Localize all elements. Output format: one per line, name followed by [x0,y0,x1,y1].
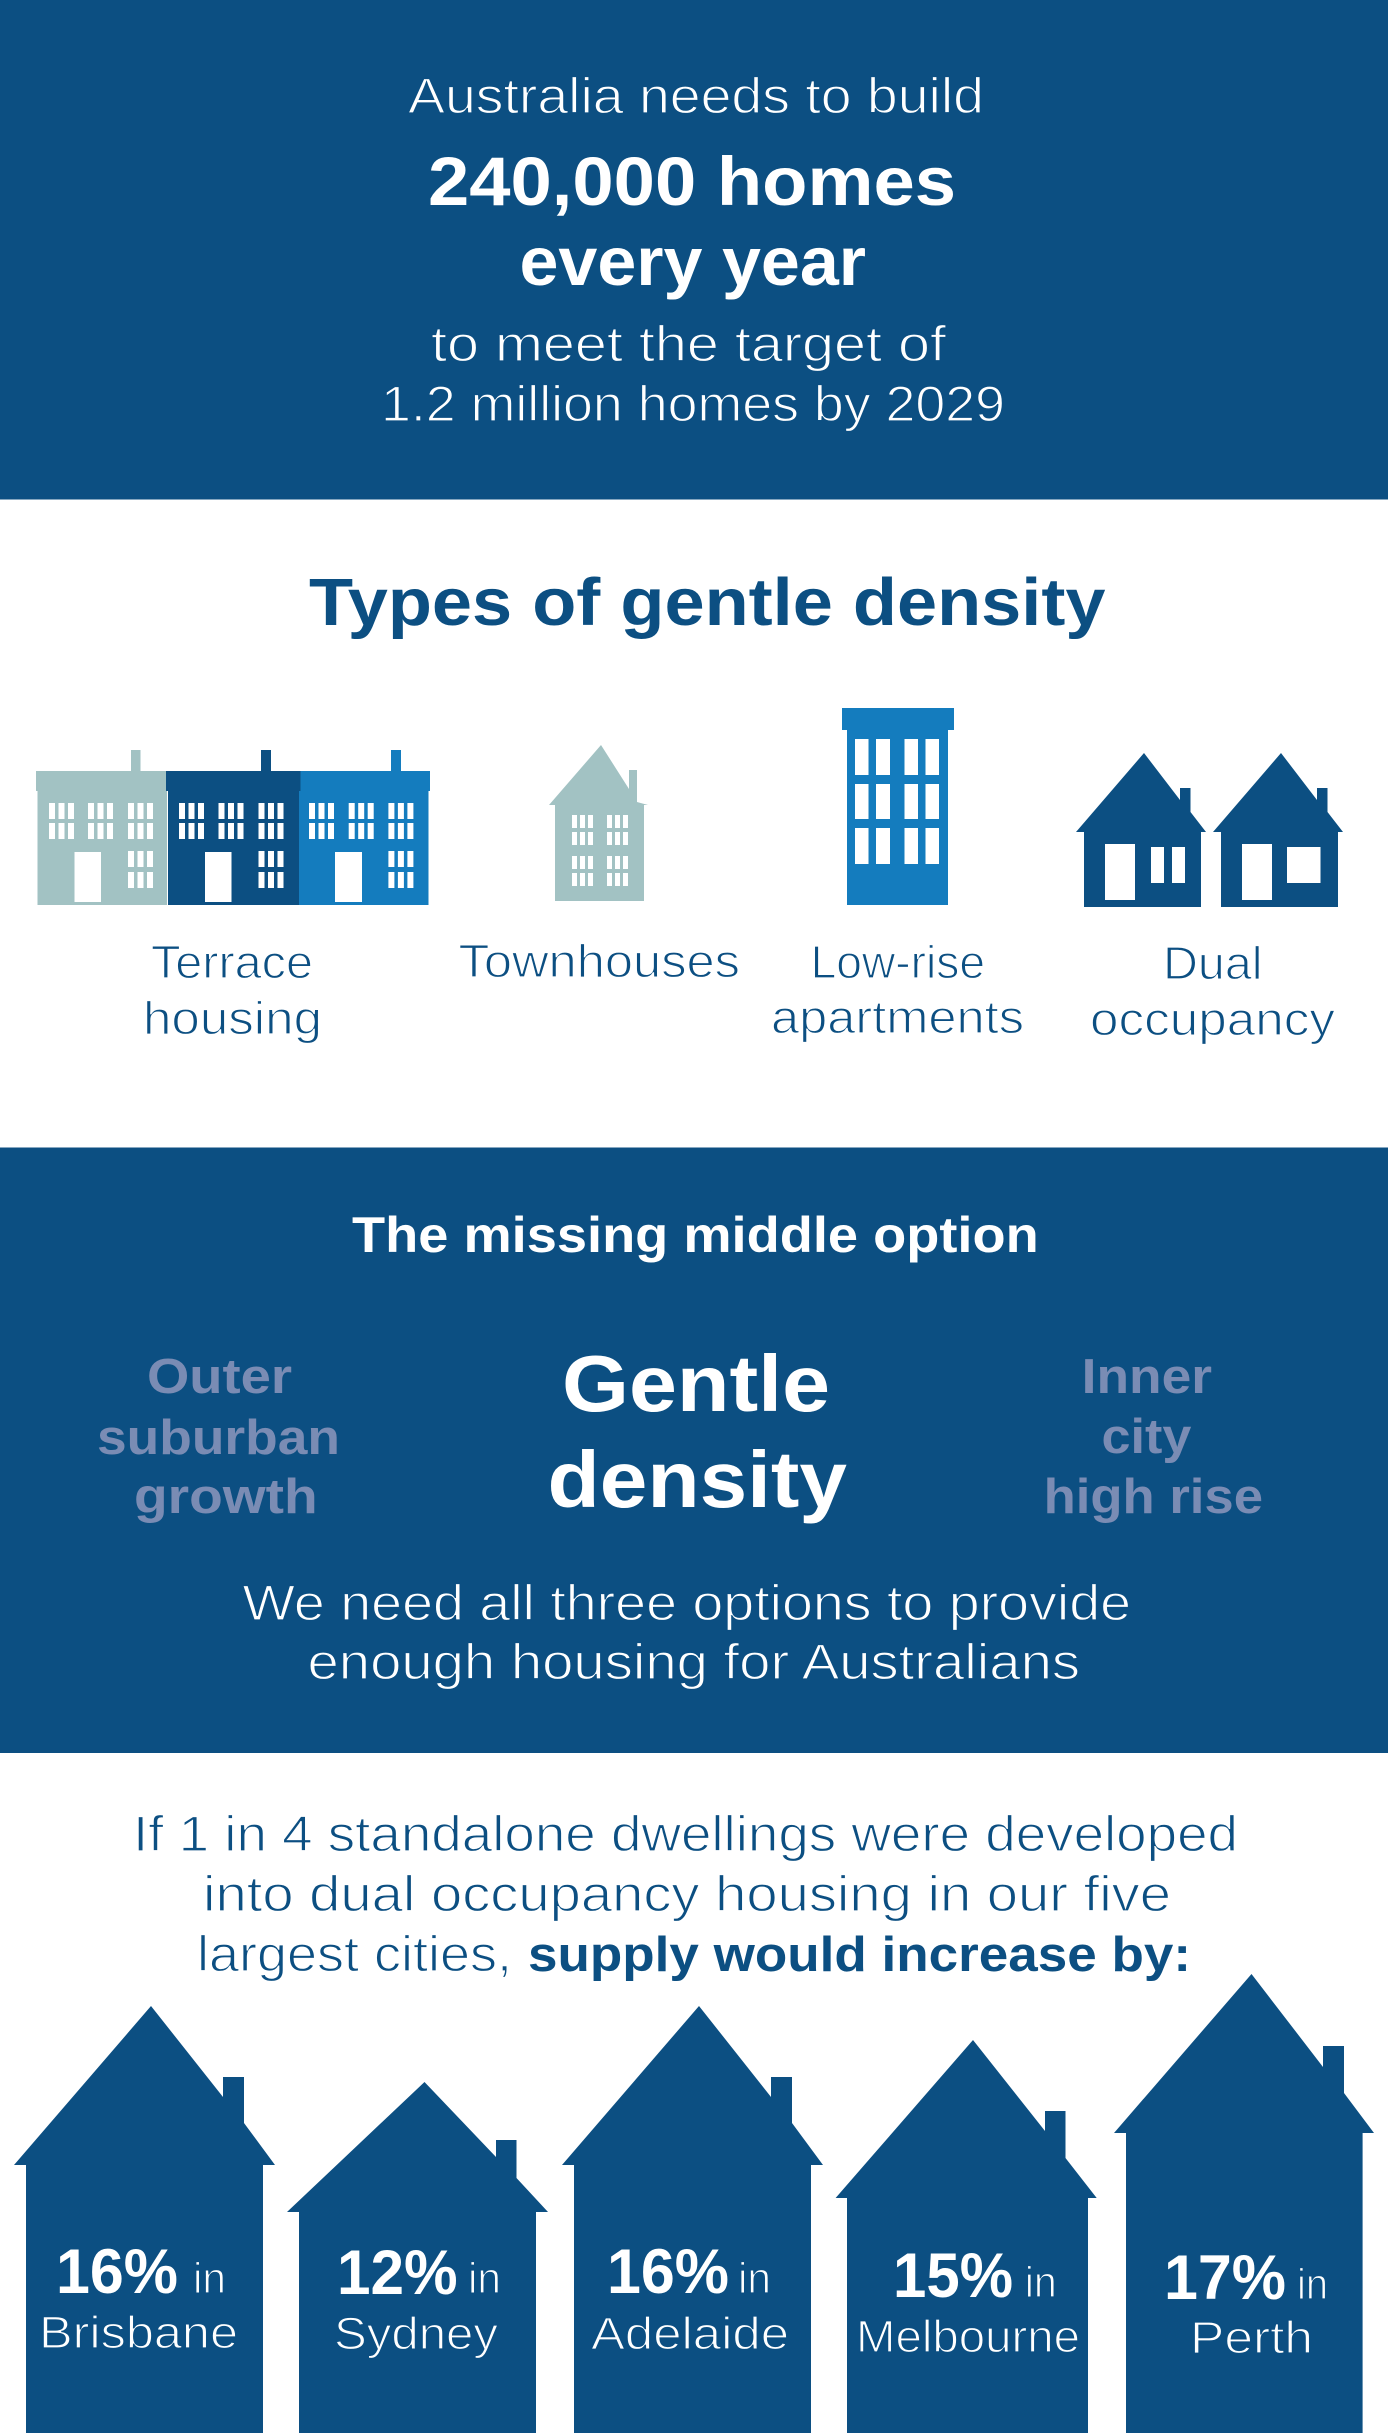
text: Inner city high rise: high rise [1044,1470,1263,1524]
house: Adelaide 16%: Adelaide [591,2308,789,2359]
text: we need all three options [242,1575,1131,1690]
house: Adelaide 16%: in [738,2254,771,2303]
text: Inner city high rise [1044,1350,1263,1524]
icon: terrace housing [36,750,430,905]
text: Inner city high rise: Inner [1082,1350,1212,1404]
text: Gentle density [548,1339,848,1524]
text: Gentle density: density [548,1435,848,1524]
text: we need all three options: We need all three options to provide [242,1575,1131,1631]
label: Terrace housing: Terrace [151,936,313,988]
icon: low-rise apartments [842,708,954,905]
label: Low-rise apartments: Low-rise [811,936,985,988]
icon: townhouse [549,745,648,901]
text: supply increase statement: largest cities, [197,1926,512,1982]
house: Melbourne 15%: in [1025,2258,1057,2307]
house: Melbourne 15% [836,2040,1097,2433]
house: Sydney 12%: Sydney [334,2308,499,2359]
panel: the missing middle option [0,1148,1388,1753]
heading: Types of gentle density: Types of gentle density [309,565,1106,640]
label: Low-rise apartments [771,936,1024,1043]
house: Brisbane 16%: in [193,2254,226,2303]
house: Brisbane 16% [14,2006,275,2433]
label: Dual occupancy: occupancy [1090,993,1335,1045]
label: Townhouses: Townhouses [458,935,740,987]
house: Perth 17%: Perth [1190,2312,1313,2363]
label: Dual occupancy: Dual [1163,937,1262,989]
house: Adelaide 16% [562,2006,823,2433]
text: we need all three options: enough housing for Australians [308,1634,1080,1690]
house: Adelaide 16%: 16% [607,2237,729,2307]
label: Low-rise apartments: apartments [771,991,1024,1043]
text: supply increase statement: supply would increase by: [528,1928,1191,1982]
text: Inner city high rise: city [1102,1410,1191,1464]
house: Melbourne 15%: Melbourne [856,2311,1080,2362]
text: supply increase statement [133,1806,1238,1982]
label: Dual occupancy [1090,937,1335,1045]
house: Sydney 12% [287,2082,548,2433]
heading: 240,000 homes: 240,000 homes [428,143,956,220]
text: 1.2 million homes by 2029: 1.2 million homes by 2029 [381,376,1005,432]
text: Gentle density: Gentle [562,1339,830,1428]
house: Perth 17% [1114,1974,1374,2433]
house: Sydney 12%: in [468,2254,501,2303]
heading: every year: every year [520,223,866,300]
text: supply increase statement: into dual occupancy housing in our five [203,1866,1171,1922]
house: Perth 17%: 17% [1164,2243,1286,2313]
text: Australia needs to build: Australia needs to build [408,68,984,124]
label: Terrace housing [143,936,322,1044]
house: Melbourne 15%: 15% [893,2241,1013,2311]
house: Perth 17%: in [1297,2260,1328,2309]
heading: The missing middle option: The missing middle option [352,1207,1039,1263]
text: Outer suburban growth: Outer [147,1350,292,1404]
text: to meet the target of: to meet the target of [431,316,946,372]
text: Outer suburban growth: growth [134,1470,318,1524]
text: supply increase statement: If 1 in 4 standalone dwellings were developed [133,1806,1238,1862]
house: Brisbane 16%: 16% [56,2237,178,2307]
label: Terrace housing: housing [143,992,322,1044]
house: Brisbane 16%: Brisbane [39,2307,238,2358]
text: Outer suburban growth [97,1350,340,1524]
text: Outer suburban growth: suburban [97,1411,340,1465]
house: Sydney 12%: 12% [337,2238,458,2308]
icon: dual occupancy houses [1076,753,1343,907]
panel: header banner [0,0,1388,500]
